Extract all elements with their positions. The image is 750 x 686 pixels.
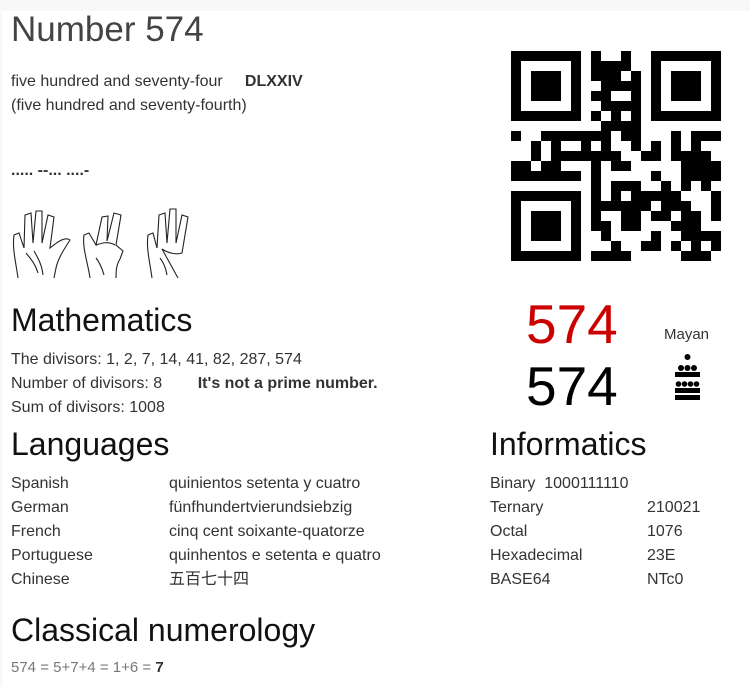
title: Number 574: [11, 10, 204, 49]
icon: mayan numeral: [675, 354, 700, 400]
informatics table: [490, 475, 700, 588]
languages table: 五百七十四: [169, 571, 249, 588]
heading: Classical numerology: Classical numerology: [11, 612, 315, 648]
mayan label: Mayan: [664, 326, 709, 343]
QR code: [511, 51, 721, 261]
languages table: German: [11, 499, 69, 516]
big number red: 574: [526, 293, 618, 355]
informatics table: BASE64: [490, 571, 550, 588]
languages table: quinientos setenta y cuatro: [169, 475, 360, 492]
languages table: cinq cent soixante-quatorze: [169, 523, 365, 540]
mathematics facts: The divisors: 1, 2, 7, 14, 41, 82, 287, 574: [11, 351, 302, 368]
heading: Informatics: Informatics: [490, 426, 646, 462]
mathematics facts: Number of divisors: 8 It's not a prime number.: [11, 375, 378, 392]
number name text: five hundred and seventy-four DLXXIV: [11, 73, 303, 90]
morse code: ..... --... ....-: [11, 162, 89, 179]
informatics table: NTc0: [647, 571, 683, 588]
heading: Mathematics: Mathematics: [11, 302, 192, 338]
informatics table: Binary 1000111110: [490, 475, 628, 492]
informatics table: Hexadecimal: [490, 547, 582, 564]
informatics table: 210021: [647, 499, 700, 516]
languages table: Portuguese: [11, 547, 93, 564]
informatics table: Ternary: [490, 499, 543, 516]
languages table: [11, 475, 381, 588]
languages table: Spanish: [11, 475, 69, 492]
number name text: (five hundred and seventy-fourth): [11, 97, 247, 114]
icon: hands sign language: [12, 208, 189, 278]
informatics table: 23E: [647, 547, 675, 564]
big number black: 574: [526, 355, 618, 417]
heading: Languages: Languages: [11, 426, 169, 462]
languages table: fünfhundertvierundsiebzig: [169, 499, 352, 516]
numerology calculation: 574 = 5+7+4 = 1+6 = 7: [11, 659, 164, 676]
informatics table: Octal: [490, 523, 527, 540]
languages table: Chinese: [11, 571, 70, 588]
mathematics facts: [11, 351, 378, 416]
informatics table: 1076: [647, 523, 683, 540]
number name text: [11, 73, 303, 114]
mathematics facts: Sum of divisors: 1008: [11, 399, 165, 416]
languages table: quinhentos e setenta e quatro: [169, 547, 381, 564]
languages table: French: [11, 523, 61, 540]
